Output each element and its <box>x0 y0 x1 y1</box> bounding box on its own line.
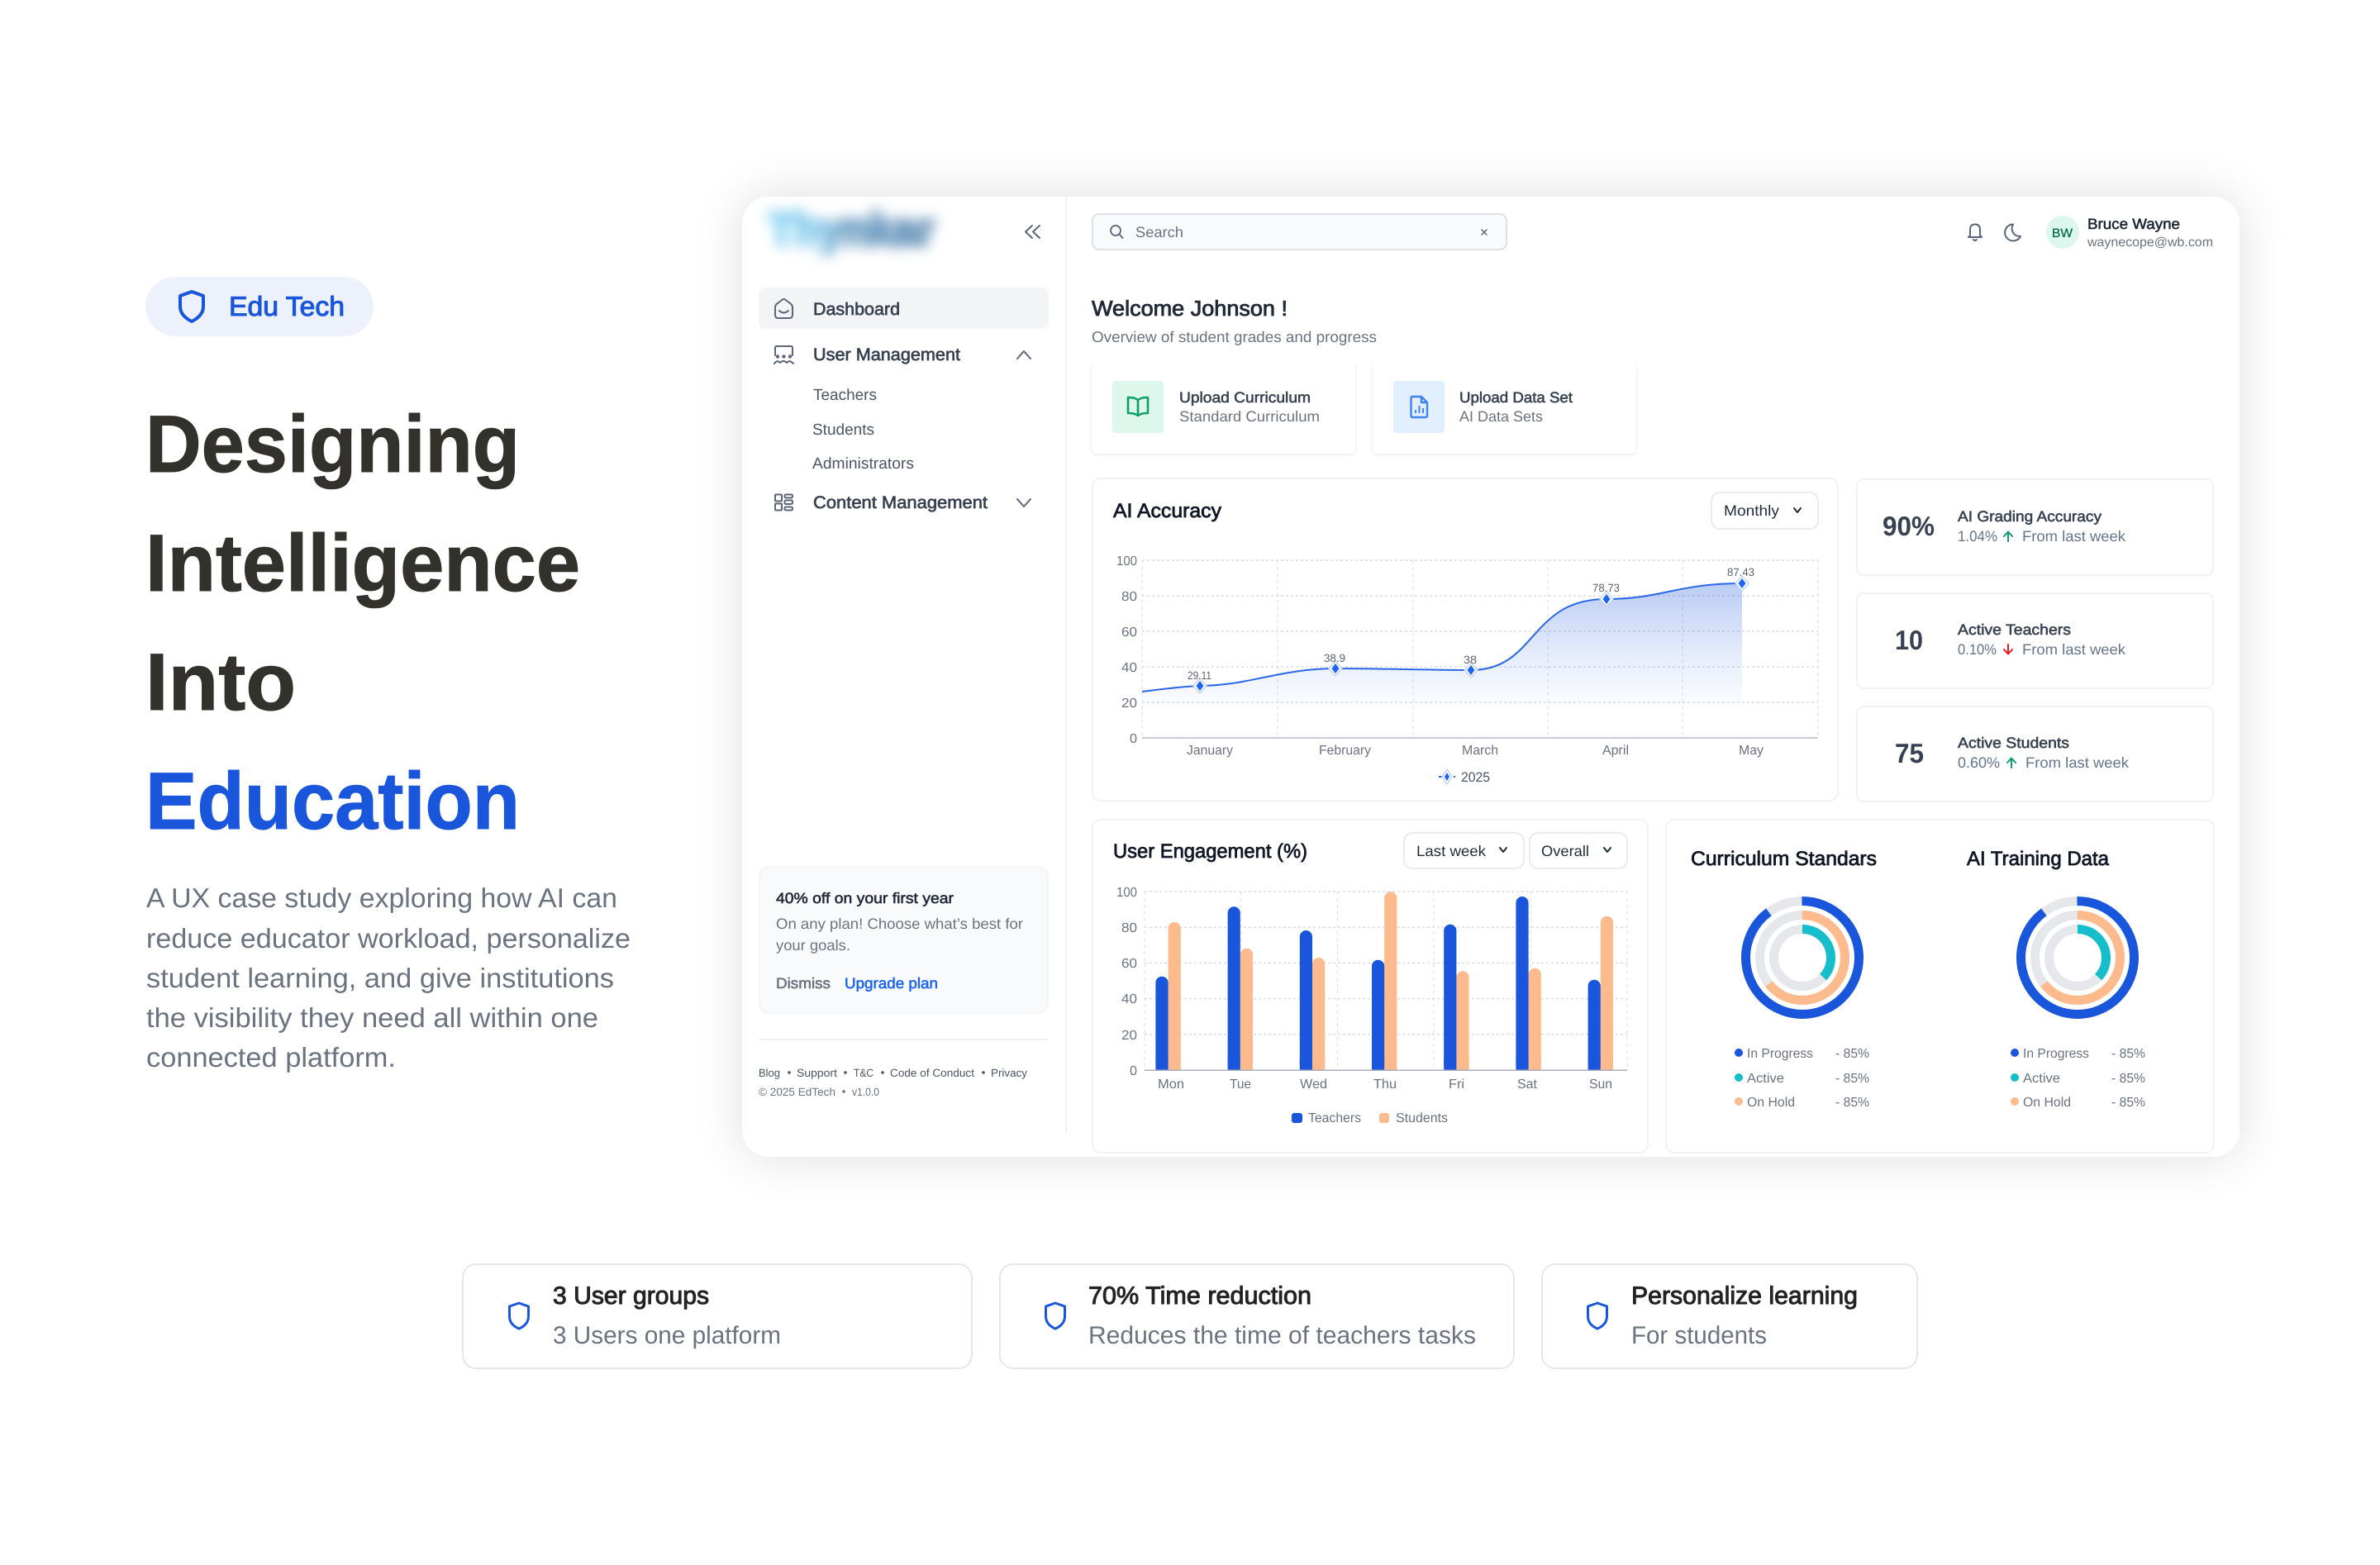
area line chart: April <box>1602 744 1629 758</box>
grouped bar chart: 100 <box>1116 886 1137 900</box>
chart title: User Engagement (%) <box>1113 840 1307 863</box>
upload card: curriculum <box>1092 360 1355 454</box>
feature card: 3 User groups: 3 User groups <box>553 1282 709 1310</box>
sidebar <box>759 205 1049 1098</box>
chart legend: 2025 <box>1439 769 1490 785</box>
donut legend: training data: In Progress <box>2023 1047 2089 1061</box>
sub nav list: Administrators <box>812 455 914 473</box>
feature card: 70% Time reduction: 70% Time reduction <box>1088 1282 1311 1310</box>
Curriculum Standars column <box>1691 848 1877 1110</box>
title: Into <box>145 636 296 727</box>
top bar <box>1092 214 2213 250</box>
title: Designing <box>145 398 520 489</box>
description paragraph: connected platform. <box>146 1042 396 1073</box>
promo callout: On any plan! Choose what’s best for <box>776 916 1023 932</box>
grouped bar chart: 60 <box>1121 957 1137 971</box>
title <box>145 398 580 846</box>
upload card: data set: AI Data Sets <box>1459 408 1543 425</box>
nav item: User Management: User Management <box>813 345 960 364</box>
welcome heading: Welcome Johnson ! <box>1092 296 1288 321</box>
area line chart: 20 <box>1121 697 1137 711</box>
sidebar footer links: © 2025 EdTech <box>759 1086 835 1098</box>
stat card: Active Students: From last week <box>2025 754 2130 771</box>
grouped bar chart: Fri <box>1449 1077 1464 1092</box>
icon: collapse sidebar <box>1026 226 1040 238</box>
area line chart <box>1116 554 1818 758</box>
dropdown: Last week <box>1404 833 1524 868</box>
stat card: AI Grading Accuracy: AI Grading Accuracy <box>1958 508 2102 525</box>
area line chart: 38.9 <box>1324 652 1345 664</box>
sidebar footer links: v1.0.0 <box>852 1086 879 1098</box>
panel: donut charts <box>1666 820 2214 1153</box>
donut legend: curriculum: In Progress <box>1747 1047 1813 1061</box>
promo callout: Dismiss <box>776 975 831 992</box>
stat card: Active Teachers: From last week <box>2022 641 2126 658</box>
donut legend: curriculum: - 85% <box>1835 1096 1869 1110</box>
description paragraph <box>146 882 631 1073</box>
dropdown: Last week: Last week <box>1416 843 1487 859</box>
donut legend: training data <box>2011 1047 2145 1110</box>
donut chart: curriculum <box>1745 901 1859 1015</box>
grouped bar chart: Sat <box>1517 1077 1538 1092</box>
sidebar footer links: Code of Conduct <box>890 1067 974 1079</box>
promo callout: Upgrade plan <box>845 975 938 992</box>
dropdown: Overall <box>1530 833 1627 868</box>
area line chart: 29.11 <box>1188 669 1211 682</box>
search box: Search <box>1135 224 1183 240</box>
stat card: Active Teachers: Active Teachers <box>1958 621 2071 638</box>
feature card: Personalize learning: For students <box>1631 1322 1767 1349</box>
grouped bar chart: 0 <box>1130 1064 1137 1078</box>
search box <box>1092 214 1507 250</box>
area line chart: 80 <box>1121 590 1137 604</box>
donut legend: training data: - 85% <box>2111 1096 2145 1110</box>
stat card: Active Students <box>1857 706 2213 802</box>
nav item: Dashboard <box>759 288 1049 329</box>
donut legend: training data: Active <box>2023 1072 2060 1086</box>
stat card: Active Students: 0.60% <box>1958 754 2000 771</box>
stat card: AI Grading Accuracy: 1.04% <box>1958 528 1997 545</box>
sub nav list: Teachers <box>813 387 877 404</box>
stat card: Active Students: Active Students <box>1958 735 2069 751</box>
donut legend: curriculum: - 85% <box>1835 1047 1869 1061</box>
user profile: Bruce Wayne <box>2087 216 2180 232</box>
area line chart: 0 <box>1130 732 1137 746</box>
sub nav list: Students <box>812 421 874 439</box>
donut chart: training data <box>2021 901 2134 1015</box>
donut legend: training data: On Hold <box>2023 1096 2071 1110</box>
area line chart: March <box>1462 744 1498 758</box>
donut legend: curriculum: Active <box>1747 1072 1784 1086</box>
chart legend: 2025: 2025 <box>1461 770 1490 785</box>
stat card: AI Grading Accuracy <box>1857 479 2213 575</box>
sidebar footer links: Support <box>797 1067 837 1079</box>
chart legend: Teachers <box>1308 1111 1361 1125</box>
donut legend: training data: - 85% <box>2111 1047 2145 1061</box>
upload card: curriculum: Upload Curriculum <box>1179 389 1311 406</box>
nav item: Content Management <box>775 493 1031 512</box>
sidebar footer links: T&C <box>854 1067 873 1079</box>
grouped bar chart: Wed <box>1300 1077 1327 1092</box>
area line chart: January <box>1187 744 1233 758</box>
left intro column <box>145 277 631 1073</box>
feature card: 70% Time reduction: Reduces the time of teachers tasks <box>1088 1322 1476 1349</box>
nav item: User Management <box>774 345 1031 364</box>
sidebar footer links <box>759 1067 1027 1098</box>
user profile <box>2046 216 2213 250</box>
area line chart: 38 <box>1464 654 1477 666</box>
feature card: 3 User groups <box>463 1264 972 1368</box>
stat card: Active Teachers: 10 <box>1895 625 1923 655</box>
upload card: curriculum: Standard Curriculum <box>1179 408 1320 425</box>
chart legend: Students <box>1396 1111 1448 1125</box>
user profile: waynecope@wb.com <box>2087 235 2213 250</box>
sidebar footer links: Privacy <box>991 1067 1027 1079</box>
upload card: data set <box>1373 360 1636 454</box>
grouped bar chart: 20 <box>1121 1029 1137 1043</box>
donut legend: curriculum: On Hold <box>1747 1096 1795 1110</box>
sidebar footer links: Blog <box>759 1067 780 1079</box>
grouped bar chart: Sun <box>1589 1077 1612 1092</box>
icon: notifications bell <box>1968 225 1982 240</box>
grouped bar chart <box>1116 886 1627 1092</box>
area line chart: 78.73 <box>1592 582 1620 594</box>
stat card: Active Teachers <box>1857 593 2213 688</box>
area line chart: February <box>1319 744 1371 758</box>
badge: Edu Tech: Edu Tech <box>229 291 345 321</box>
description paragraph: reduce educator workload, personalize <box>146 923 631 954</box>
AI Training Data column <box>1967 848 2145 1110</box>
icon: dark mode moon <box>2005 225 2021 240</box>
donut legend: curriculum: - 85% <box>1835 1072 1869 1086</box>
donut legend: training data: - 85% <box>2111 1072 2145 1086</box>
promo callout <box>759 867 1048 1013</box>
title: Education <box>145 755 520 846</box>
donut legend: curriculum <box>1735 1047 1869 1110</box>
description paragraph: A UX case study exploring how AI can <box>146 882 617 913</box>
blurred logo: Thynkar <box>769 205 934 254</box>
promo callout: your goals. <box>776 937 850 954</box>
area line chart: 87.43 <box>1727 566 1754 578</box>
chart title: AI Accuracy <box>1113 500 1221 522</box>
panel: User Engagement bar chart <box>1092 820 1648 1153</box>
feature card: Personalize learning <box>1542 1264 1917 1368</box>
stat card: Active Teachers: 0.10% <box>1958 641 1997 658</box>
promo callout: 40% off on your first year <box>776 890 954 906</box>
dashboard mockup card <box>742 197 2240 1157</box>
stat card: AI Grading Accuracy: 90% <box>1883 511 1935 541</box>
panel: AI Accuracy line chart <box>1092 478 1838 801</box>
area line chart: 100 <box>1116 554 1137 568</box>
grouped bar chart: Mon <box>1158 1077 1184 1092</box>
chart legend <box>1292 1111 1448 1125</box>
nav item: Dashboard: Dashboard <box>813 300 900 319</box>
feature card: Personalize learning: Personalize learning <box>1631 1282 1858 1310</box>
grouped bar chart: Tue <box>1230 1077 1251 1092</box>
description paragraph: the visibility they need all within one <box>146 1002 598 1033</box>
badge: Edu Tech <box>145 277 374 336</box>
dropdown: Monthly: Monthly <box>1724 502 1779 519</box>
area line chart: 60 <box>1121 626 1137 640</box>
nav item: Content Management: Content Management <box>813 493 988 512</box>
Curriculum Standars column: Curriculum Standars <box>1691 848 1877 870</box>
feature card: 70% Time reduction <box>1000 1264 1514 1368</box>
sub nav list <box>812 387 914 473</box>
description paragraph: student learning, and give institutions <box>146 963 614 993</box>
title: Intelligence <box>145 517 580 608</box>
grouped bar chart: 40 <box>1121 992 1137 1006</box>
welcome heading: Overview of student grades and progress <box>1092 328 1377 345</box>
grouped bar chart: 80 <box>1121 921 1137 935</box>
user profile: BW <box>2052 226 2073 240</box>
upload card: data set: Upload Data Set <box>1459 389 1573 406</box>
grouped bar chart: Thu <box>1373 1077 1397 1092</box>
feature card: 3 User groups: 3 Users one platform <box>553 1322 781 1349</box>
stat card: AI Grading Accuracy: From last week <box>2022 528 2126 545</box>
AI Training Data column: AI Training Data <box>1967 848 2110 870</box>
dropdown: Monthly <box>1711 492 1818 529</box>
welcome heading <box>1092 296 1377 345</box>
area line chart: May <box>1739 744 1764 758</box>
stat card: Active Students: 75 <box>1895 738 1924 768</box>
area line chart: 40 <box>1121 661 1137 675</box>
dropdown: Overall: Overall <box>1541 843 1589 859</box>
